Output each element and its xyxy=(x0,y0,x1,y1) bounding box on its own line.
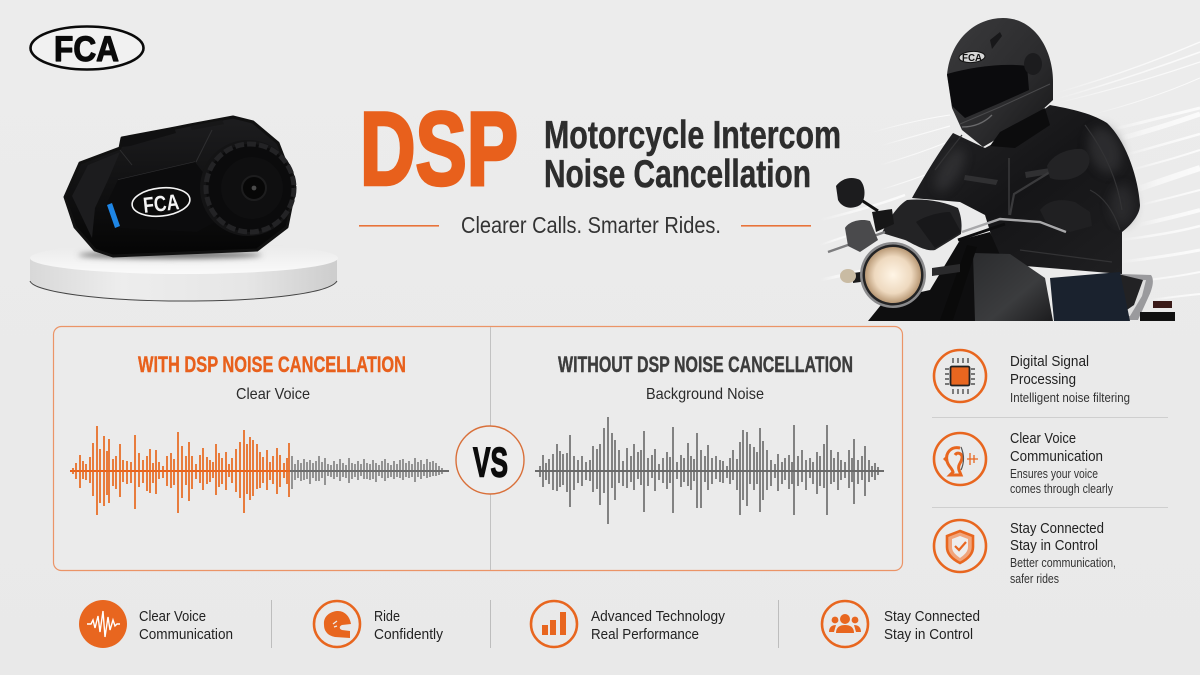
logo: FCA xyxy=(54,30,119,69)
feature: stay connected xyxy=(934,520,1116,586)
text: Ride xyxy=(374,608,400,625)
fork xyxy=(940,245,977,320)
neck xyxy=(990,108,1050,148)
icon: bars xyxy=(531,601,577,647)
rear rack xyxy=(1120,274,1153,320)
text: Clear Voice xyxy=(139,608,206,625)
VS badge: VS xyxy=(473,438,508,486)
handlebars xyxy=(828,219,1066,252)
benefit: stay connected xyxy=(822,601,980,647)
instrument cluster xyxy=(872,209,894,232)
text: Ensures your voice xyxy=(1010,467,1098,481)
icon: waveform xyxy=(79,600,127,648)
title: line one: Motorcycle Intercom xyxy=(544,114,841,157)
without DSP subheading: Background Noise xyxy=(646,386,764,403)
fairing xyxy=(882,199,962,250)
text: Digital Signal xyxy=(1010,353,1089,370)
podium xyxy=(30,242,338,301)
text: Real Performance xyxy=(591,626,699,643)
gloves xyxy=(845,220,878,252)
text xyxy=(374,608,443,643)
motion streaks xyxy=(820,42,1200,300)
feature: digital signal processing xyxy=(934,350,1130,405)
feature: clear voice communication xyxy=(934,430,1114,496)
rider on motorcycle xyxy=(828,18,1175,321)
text: comes through clearly xyxy=(1010,482,1114,496)
benefit: ride confidently xyxy=(314,601,443,647)
text xyxy=(1010,520,1116,586)
helmet xyxy=(947,18,1053,147)
text xyxy=(1010,353,1130,405)
with DSP heading: WITH DSP NOISE CANCELLATION xyxy=(138,352,406,377)
text: Communication xyxy=(1010,448,1103,465)
text: Stay in Control xyxy=(1010,537,1098,554)
text: Stay Connected xyxy=(1010,520,1104,537)
tagline: Clearer Calls. Smarter Rides. xyxy=(461,212,721,238)
lower bike mass xyxy=(868,232,1000,321)
with DSP subheading: Clear Voice xyxy=(236,386,310,403)
text xyxy=(591,608,725,643)
text: Intelligent noise filtering xyxy=(1010,391,1130,405)
benefit: advanced technology xyxy=(531,601,725,647)
device badge xyxy=(131,185,191,219)
benefit: clear voice xyxy=(79,600,233,648)
bottom benefits row xyxy=(79,600,980,648)
intercom device xyxy=(65,117,296,256)
waveform: clear voice xyxy=(70,426,449,515)
feature list xyxy=(932,350,1168,586)
tank xyxy=(973,253,1053,321)
mirror right xyxy=(1010,149,1089,215)
icon: helmet xyxy=(314,601,360,647)
text: Clear Voice xyxy=(1010,430,1076,447)
helmet: FCA xyxy=(962,53,982,64)
product: intercom on podium xyxy=(30,117,338,301)
icon: shield xyxy=(934,520,986,572)
icon: people xyxy=(822,601,868,647)
device badge: FCA xyxy=(142,189,180,218)
jacket xyxy=(912,105,1140,274)
text xyxy=(139,608,233,643)
turn signals xyxy=(853,271,868,283)
dial xyxy=(200,140,296,236)
text: Stay Connected xyxy=(884,608,980,625)
text xyxy=(884,608,980,643)
title: DSP: DSP xyxy=(360,92,518,208)
seat xyxy=(1118,274,1143,312)
icon: chip xyxy=(934,350,986,402)
title block xyxy=(359,92,841,238)
text xyxy=(1010,430,1114,496)
text: Communication xyxy=(139,626,233,643)
comparison panel xyxy=(54,326,902,570)
headlight xyxy=(860,242,926,308)
without DSP heading: WITHOUT DSP NOISE CANCELLATION xyxy=(558,352,853,377)
logo xyxy=(30,26,144,70)
waveform: background noise xyxy=(535,417,884,524)
text: safer rides xyxy=(1010,572,1059,586)
text: Advanced Technology xyxy=(591,608,725,625)
jeans xyxy=(1050,272,1130,321)
text: Confidently xyxy=(374,626,443,643)
VS badge xyxy=(456,426,524,494)
title: line two: Noise Cancellation xyxy=(544,153,811,196)
text: Better communication, xyxy=(1010,556,1116,570)
text: Stay in Control xyxy=(884,626,973,643)
text: Processing xyxy=(1010,371,1076,388)
icon: voice xyxy=(934,433,986,485)
mirror left xyxy=(836,178,878,211)
